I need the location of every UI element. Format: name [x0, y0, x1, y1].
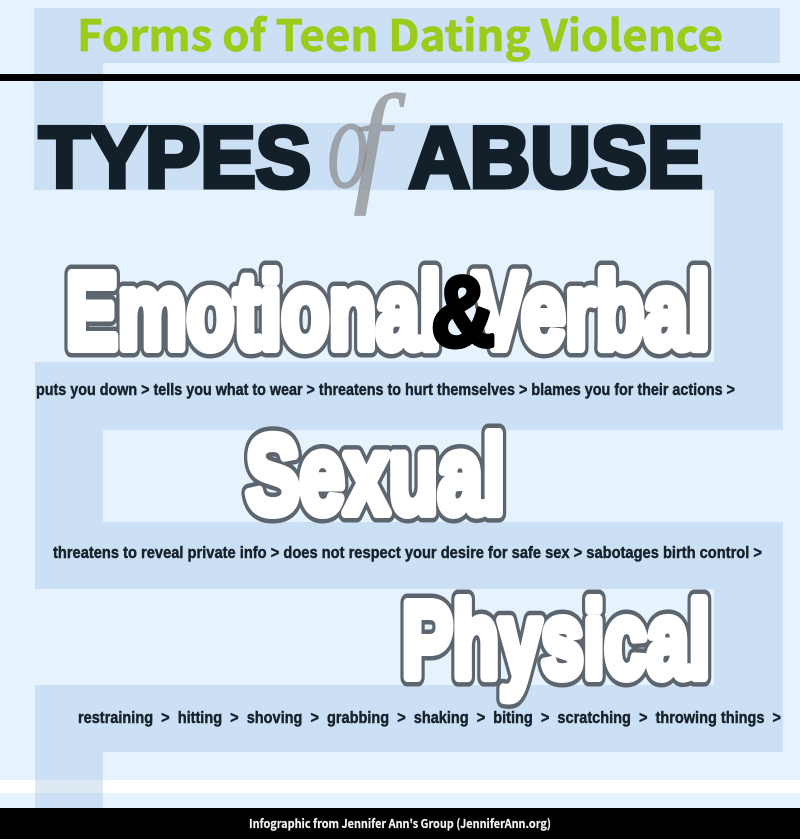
section heading: Sexual: Sexual: [246, 414, 505, 537]
outlined word: Verbal: Verbal: [473, 250, 710, 371]
heading word: TYPES: TYPES: [39, 110, 311, 206]
outlined word: Emotional: Emotional: [66, 250, 441, 371]
heading word: ABUSE: ABUSE: [409, 110, 703, 206]
ampersand: &: [431, 256, 495, 368]
footer bar: [0, 808, 800, 839]
heading word: of: o: [327, 68, 369, 216]
footer credit: Infographic from Jennifer Ann's Group (JenniferAnn.org): [249, 815, 551, 832]
white strip near bottom: [0, 780, 800, 793]
heading word: of: f: [353, 68, 406, 216]
section heading: Emotional & Verbal: [66, 250, 710, 371]
title: Forms of Teen Dating Violence: Forms of Teen Dating Violence: [77, 2, 723, 64]
outlined word: Verbal: Verbal: [473, 250, 710, 371]
section heading: Sexual: Sexual: [246, 414, 505, 537]
heading: Types of Abuse: [39, 68, 703, 216]
outlined word: Emotional: Emotional: [66, 250, 441, 371]
black divider line: [0, 74, 800, 81]
